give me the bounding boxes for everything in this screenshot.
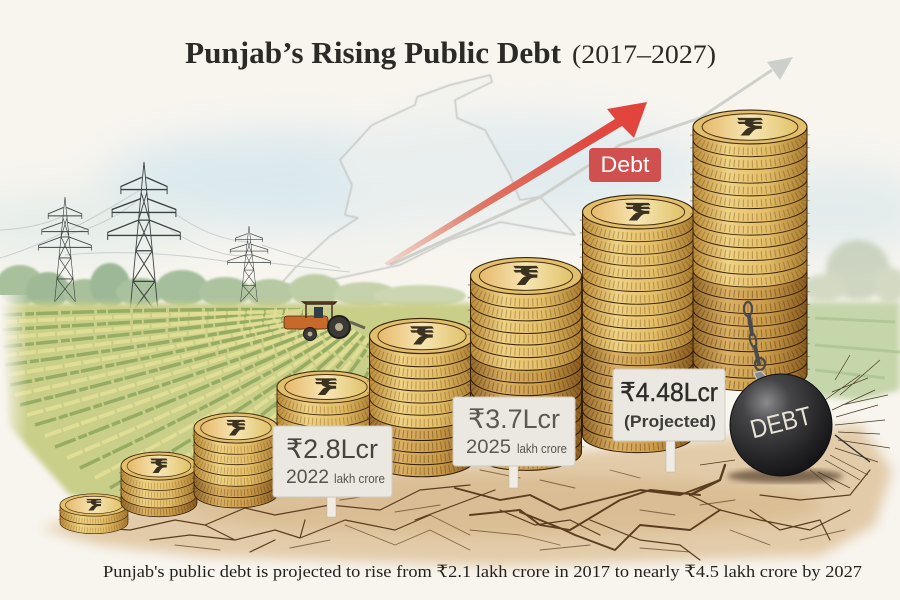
coin stack 2017: ₹ [85, 496, 103, 514]
coin stack step three [194, 413, 278, 508]
dry grass around ball [700, 355, 890, 490]
caption: Punjab's public debt is projected to rise from ₹2.1 lakh crore in 2017 to nearly ₹4.5 lakh crore by 2027 [103, 562, 863, 581]
chain [744, 302, 768, 380]
sign: 2025 value: ₹3.7Lcr [468, 404, 560, 434]
sign: 2022 value: 2022 [286, 467, 329, 488]
coin stack projected [582, 195, 694, 453]
coin stack 2017 [60, 494, 128, 534]
sign: 2022 value [273, 426, 392, 517]
arrow: red debt trend [384, 102, 647, 266]
sky wash [0, 115, 900, 260]
sign: 2025 value: lakh crore [517, 442, 567, 456]
cracked soil [40, 355, 892, 566]
map outline of Punjab [280, 75, 575, 285]
tractor [284, 302, 365, 340]
tree line, right [803, 240, 900, 303]
coin stack step two: ₹ [149, 456, 169, 478]
tree line, left [0, 263, 466, 308]
cracks [100, 465, 870, 560]
coin stack 2022 [277, 371, 375, 451]
sign: 2022 value: lakh crore [334, 472, 385, 486]
debt tag [589, 148, 661, 182]
wrecking ball with DEBT label: DEBT [747, 400, 815, 444]
shadow under ball [727, 469, 843, 483]
coin stack 2025: ₹ [511, 262, 541, 291]
debt tag: Debt [600, 152, 650, 177]
coin stack 2022: ₹ [313, 374, 339, 400]
coin stack step two [121, 452, 197, 517]
arrow: faded grey trend [390, 57, 793, 265]
title: (2017–2027) [572, 40, 716, 69]
sign: projected value: ₹4.48Lcr [620, 377, 718, 407]
sign: 2025 value: 2025 [466, 437, 511, 458]
coin stack step five [370, 318, 474, 477]
power lines [0, 190, 350, 272]
sign: 2022 value: ₹2.8Lcr [286, 434, 378, 464]
sign: 2025 value [453, 397, 575, 488]
icon: pylon right [228, 226, 270, 302]
icon: pylon left [39, 197, 91, 302]
farm field, left [0, 295, 480, 510]
sign: projected value [613, 369, 725, 472]
coin stack step three: ₹ [225, 416, 247, 440]
sign: projected value: (Projected) [624, 412, 716, 431]
coin stack projected: ₹ [623, 199, 653, 226]
coin stack 2025 [470, 258, 582, 470]
wrecking ball with DEBT label [730, 374, 870, 476]
farm field, right [800, 302, 900, 400]
coin stack 2027 [693, 110, 807, 391]
coin stack 2027: ₹ [735, 114, 765, 141]
icon: pylon centre [108, 162, 180, 315]
title: Punjab’s Rising Public Debt [185, 35, 562, 70]
coin stack step five: ₹ [408, 323, 436, 351]
